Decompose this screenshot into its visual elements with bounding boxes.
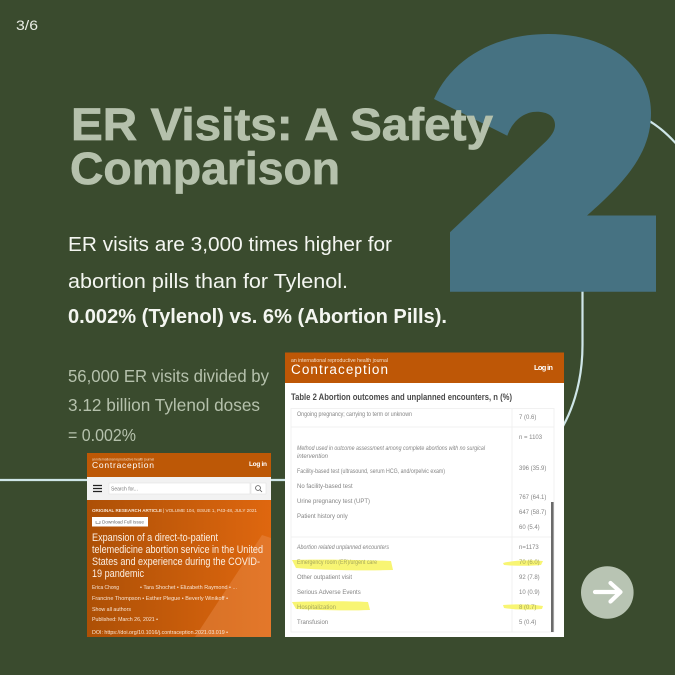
authors and publication details <box>92 585 237 636</box>
article journal header: Contraception <box>92 460 154 470</box>
outcomes table text: 396 (35.9) <box>519 466 546 472</box>
scrollbar <box>551 502 554 632</box>
outcomes table text: Hospitalization <box>297 605 336 611</box>
authors and publication details: DOI: https://doi.org/10.1016/j.contraception.2021.03.019 • <box>92 630 228 636</box>
outcomes table text: 60 (5.4) <box>519 525 540 531</box>
big numeral 2 <box>434 34 656 292</box>
journal header bar <box>285 352 564 383</box>
article title: telemedicine abortion service in the United <box>92 544 263 556</box>
authors and publication details: Francine Thompson • Esther Plegue • Beverly Winikoff • <box>92 596 228 602</box>
search bar: Search for... <box>111 486 138 492</box>
title: Comparison <box>70 143 340 194</box>
calculation text: = 0.002% <box>68 425 136 445</box>
article journal header: Log in <box>249 461 267 468</box>
search bar <box>87 477 271 500</box>
outcomes table text: n = 1103 <box>519 435 543 441</box>
page counter: 3/6 <box>16 17 38 33</box>
icon: next arrow button <box>581 566 634 619</box>
outcomes table text: 647 (58.7) <box>519 510 546 516</box>
table heading: Table 2 Abortion outcomes and unplanned encounters, n (%) <box>291 392 512 402</box>
outcomes table text: 10 (0.9) <box>519 590 540 596</box>
journal header bar: Log in <box>534 363 553 372</box>
outcomes table text: 8 (0.7) <box>519 605 536 611</box>
outcomes table text: Emergency room (ER)/urgent care <box>297 560 378 566</box>
outcomes table text: 92 (7.8) <box>519 575 540 581</box>
outcomes table text: Method used in outcome assessment among complete abortions with no surgical <box>297 446 486 452</box>
authors and publication details: • Tara Shochet • Elizabeth Raymond • ... <box>140 585 237 591</box>
outcomes table text: n=1173 <box>519 545 539 551</box>
yellow highlights <box>292 560 543 610</box>
outcomes table text <box>296 412 546 626</box>
article journal header <box>87 453 271 477</box>
title <box>70 99 493 194</box>
article meta line: ORIGINAL RESEARCH ARTICLE <box>92 508 162 513</box>
main statement text: abortion pills than for Tylenol. <box>68 271 348 293</box>
journal header bar: Contraception <box>291 362 388 377</box>
outcomes table text: 70 (6.0) <box>519 560 540 566</box>
outcomes table text: Patient history only <box>297 514 348 520</box>
article meta line: | VOLUME 104, ISSUE 1, P43-48, JULY 2021 <box>163 508 258 513</box>
outcomes table text: Urine pregnancy test (UPT) <box>297 499 370 505</box>
download button: Download Full Issue <box>102 520 145 524</box>
title: ER Visits: A Safety <box>71 99 493 150</box>
outcomes table text: Serious Adverse Events <box>297 590 361 596</box>
outcomes table text: Facility-based test (ultrasound, serum HCG, and/orpelvic exam) <box>297 469 445 475</box>
outcomes table text: intervention <box>297 454 329 460</box>
article meta line <box>92 508 258 513</box>
article journal header: an international reproductive health journal <box>92 458 154 462</box>
article title: Expansion of a direct-to-patient <box>92 532 218 544</box>
article title: States and experience during the COVID- <box>92 556 260 568</box>
main statement text: ER visits are 3,000 times higher for <box>68 234 392 256</box>
main statement text <box>68 234 447 328</box>
calculation text: 3.12 billion Tylenol doses <box>68 395 260 415</box>
panel: article screenshot <box>87 453 271 637</box>
outcomes table text: 5 (0.4) <box>519 620 536 626</box>
article title: 19 pandemic <box>92 568 145 580</box>
outcomes table text: Other outpatient visit <box>297 575 352 581</box>
article title <box>92 532 263 580</box>
outcomes table text: Transfusion <box>297 620 328 626</box>
download button <box>92 517 148 526</box>
outcomes table text: Abortion related unplanned encounters <box>296 545 389 551</box>
calculation text: 56,000 ER visits divided by <box>68 366 269 386</box>
authors and publication details: Erica Chong <box>92 585 119 591</box>
panel: journal table screenshot <box>285 352 564 637</box>
outcomes table text: No facility-based test <box>297 484 353 490</box>
outcomes table text: 7 (0.6) <box>519 415 536 421</box>
calculation text <box>68 366 269 445</box>
outcomes table text: Ongoing pregnancy; carrying to term or unknown <box>297 412 412 418</box>
authors and publication details: Published: March 26, 2021 • <box>92 617 158 623</box>
journal header bar: an international reproductive health journal <box>291 358 388 364</box>
authors and publication details: Show all authors <box>92 607 132 613</box>
main statement text: 0.002% (Tylenol) vs. 6% (Abortion Pills). <box>68 306 447 328</box>
outcomes table text: 767 (64.1) <box>519 495 546 501</box>
